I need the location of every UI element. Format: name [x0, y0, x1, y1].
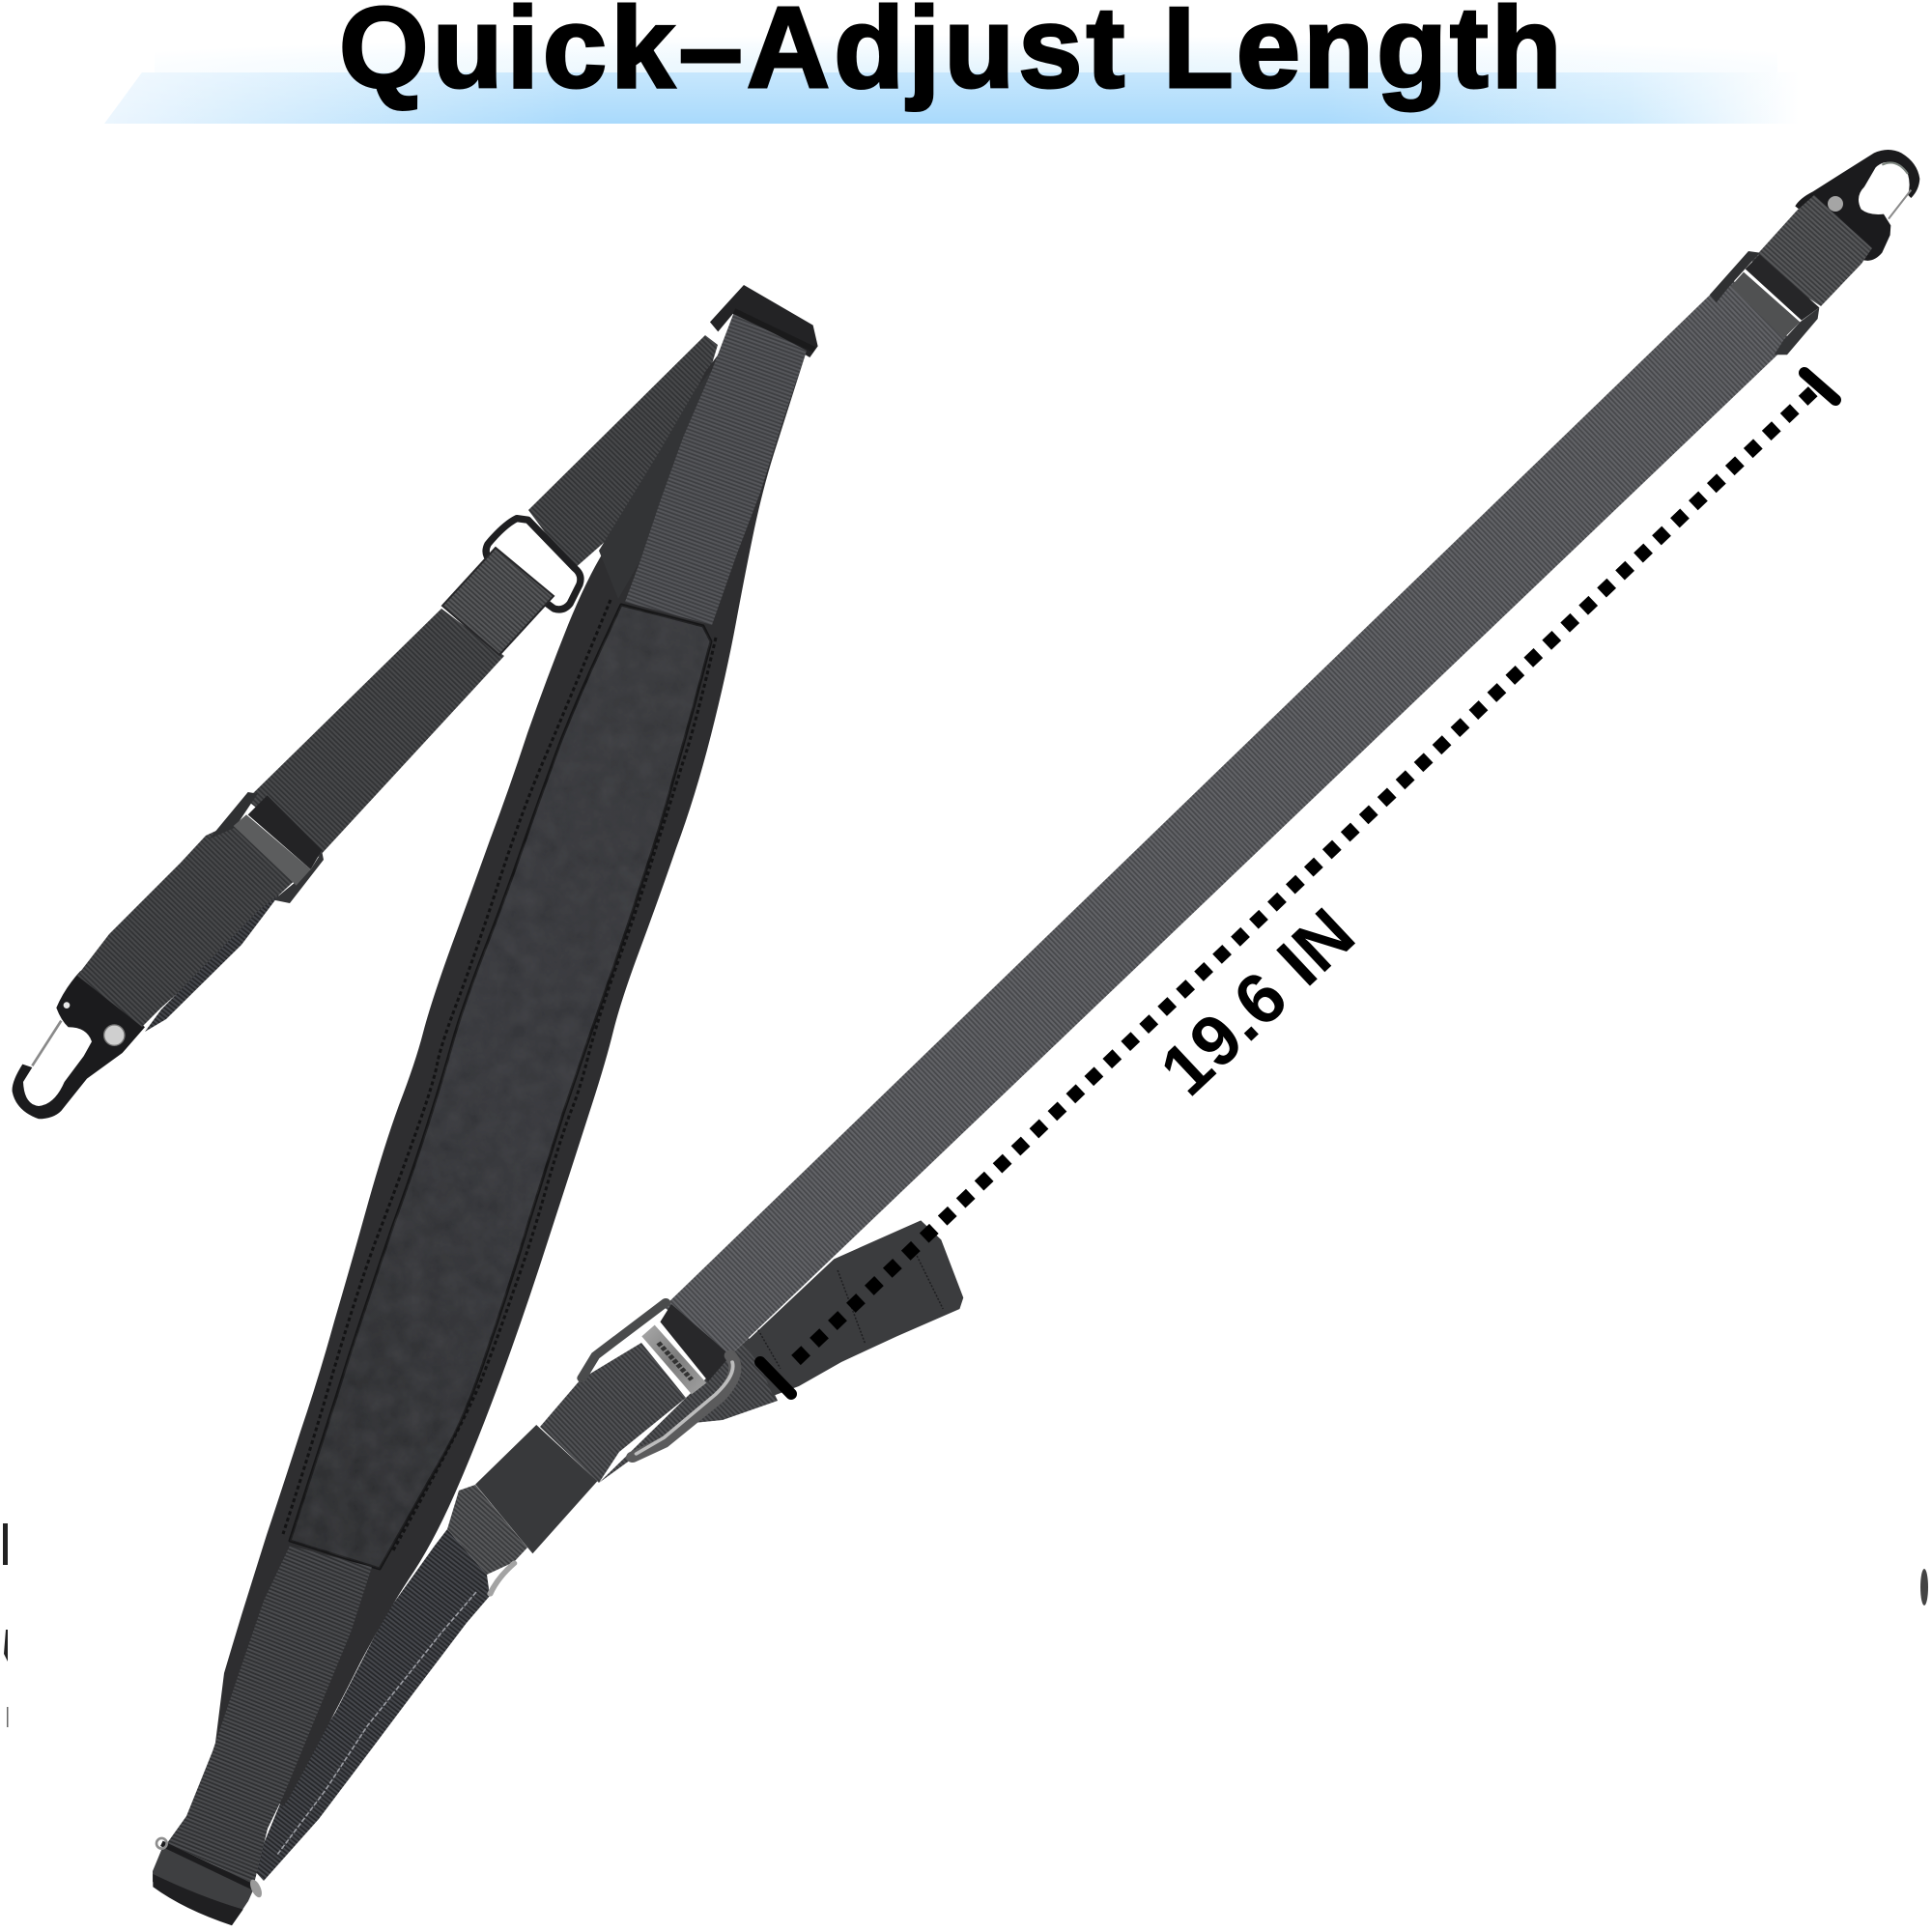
leather panel: [290, 605, 711, 1569]
strap: under webbing: [253, 1529, 490, 1881]
right slider: [1710, 251, 1819, 355]
rivet: [1828, 196, 1843, 212]
buckle frame: [582, 1302, 735, 1457]
stitching: [283, 600, 716, 1550]
right hook details: [1882, 162, 1911, 219]
bottom bar: [153, 1838, 264, 1925]
pad outer: [214, 312, 807, 1806]
dark fold: [660, 1304, 730, 1381]
left hook: [13, 971, 145, 1119]
pad inner dark sliver: [599, 370, 712, 599]
top webbing: [1751, 195, 1872, 306]
metal label: [641, 1325, 706, 1394]
long adjustable strap: [664, 150, 1919, 1355]
tail tab stitching: [758, 1253, 943, 1369]
right hook: [1795, 150, 1919, 261]
left hook details: [32, 1002, 125, 1065]
neoprene sleeve: [475, 1425, 597, 1553]
small buckle: [490, 1563, 514, 1594]
edge artefacts: [3, 1523, 1928, 1727]
keeper: [442, 548, 554, 655]
ring: [486, 519, 581, 610]
lower pad webbing: [167, 1546, 372, 1884]
dimension line: 19.6 in: [760, 373, 1835, 1394]
buckle assembly: [447, 1220, 963, 1594]
top pad webbing: [625, 312, 807, 625]
strap: upper left section with ring and hook: [13, 335, 718, 1119]
lower buckle webbing: [540, 1343, 686, 1483]
title banner: [104, 10, 1799, 124]
left slider: [210, 792, 324, 903]
upper left webbing: [528, 335, 718, 570]
top end tab: [710, 285, 818, 357]
left strap webbing: [246, 609, 504, 857]
shoulder pad: [153, 285, 818, 1925]
tail webbing: [599, 1338, 778, 1483]
top end bar: [734, 311, 814, 350]
dimension label: 19.6 IN: [1145, 893, 1370, 1111]
bottom end tab: [153, 1843, 256, 1925]
neoprene tail tab: [744, 1220, 963, 1396]
left lower webbing: [77, 821, 301, 1027]
webbing stub: [447, 1485, 527, 1575]
